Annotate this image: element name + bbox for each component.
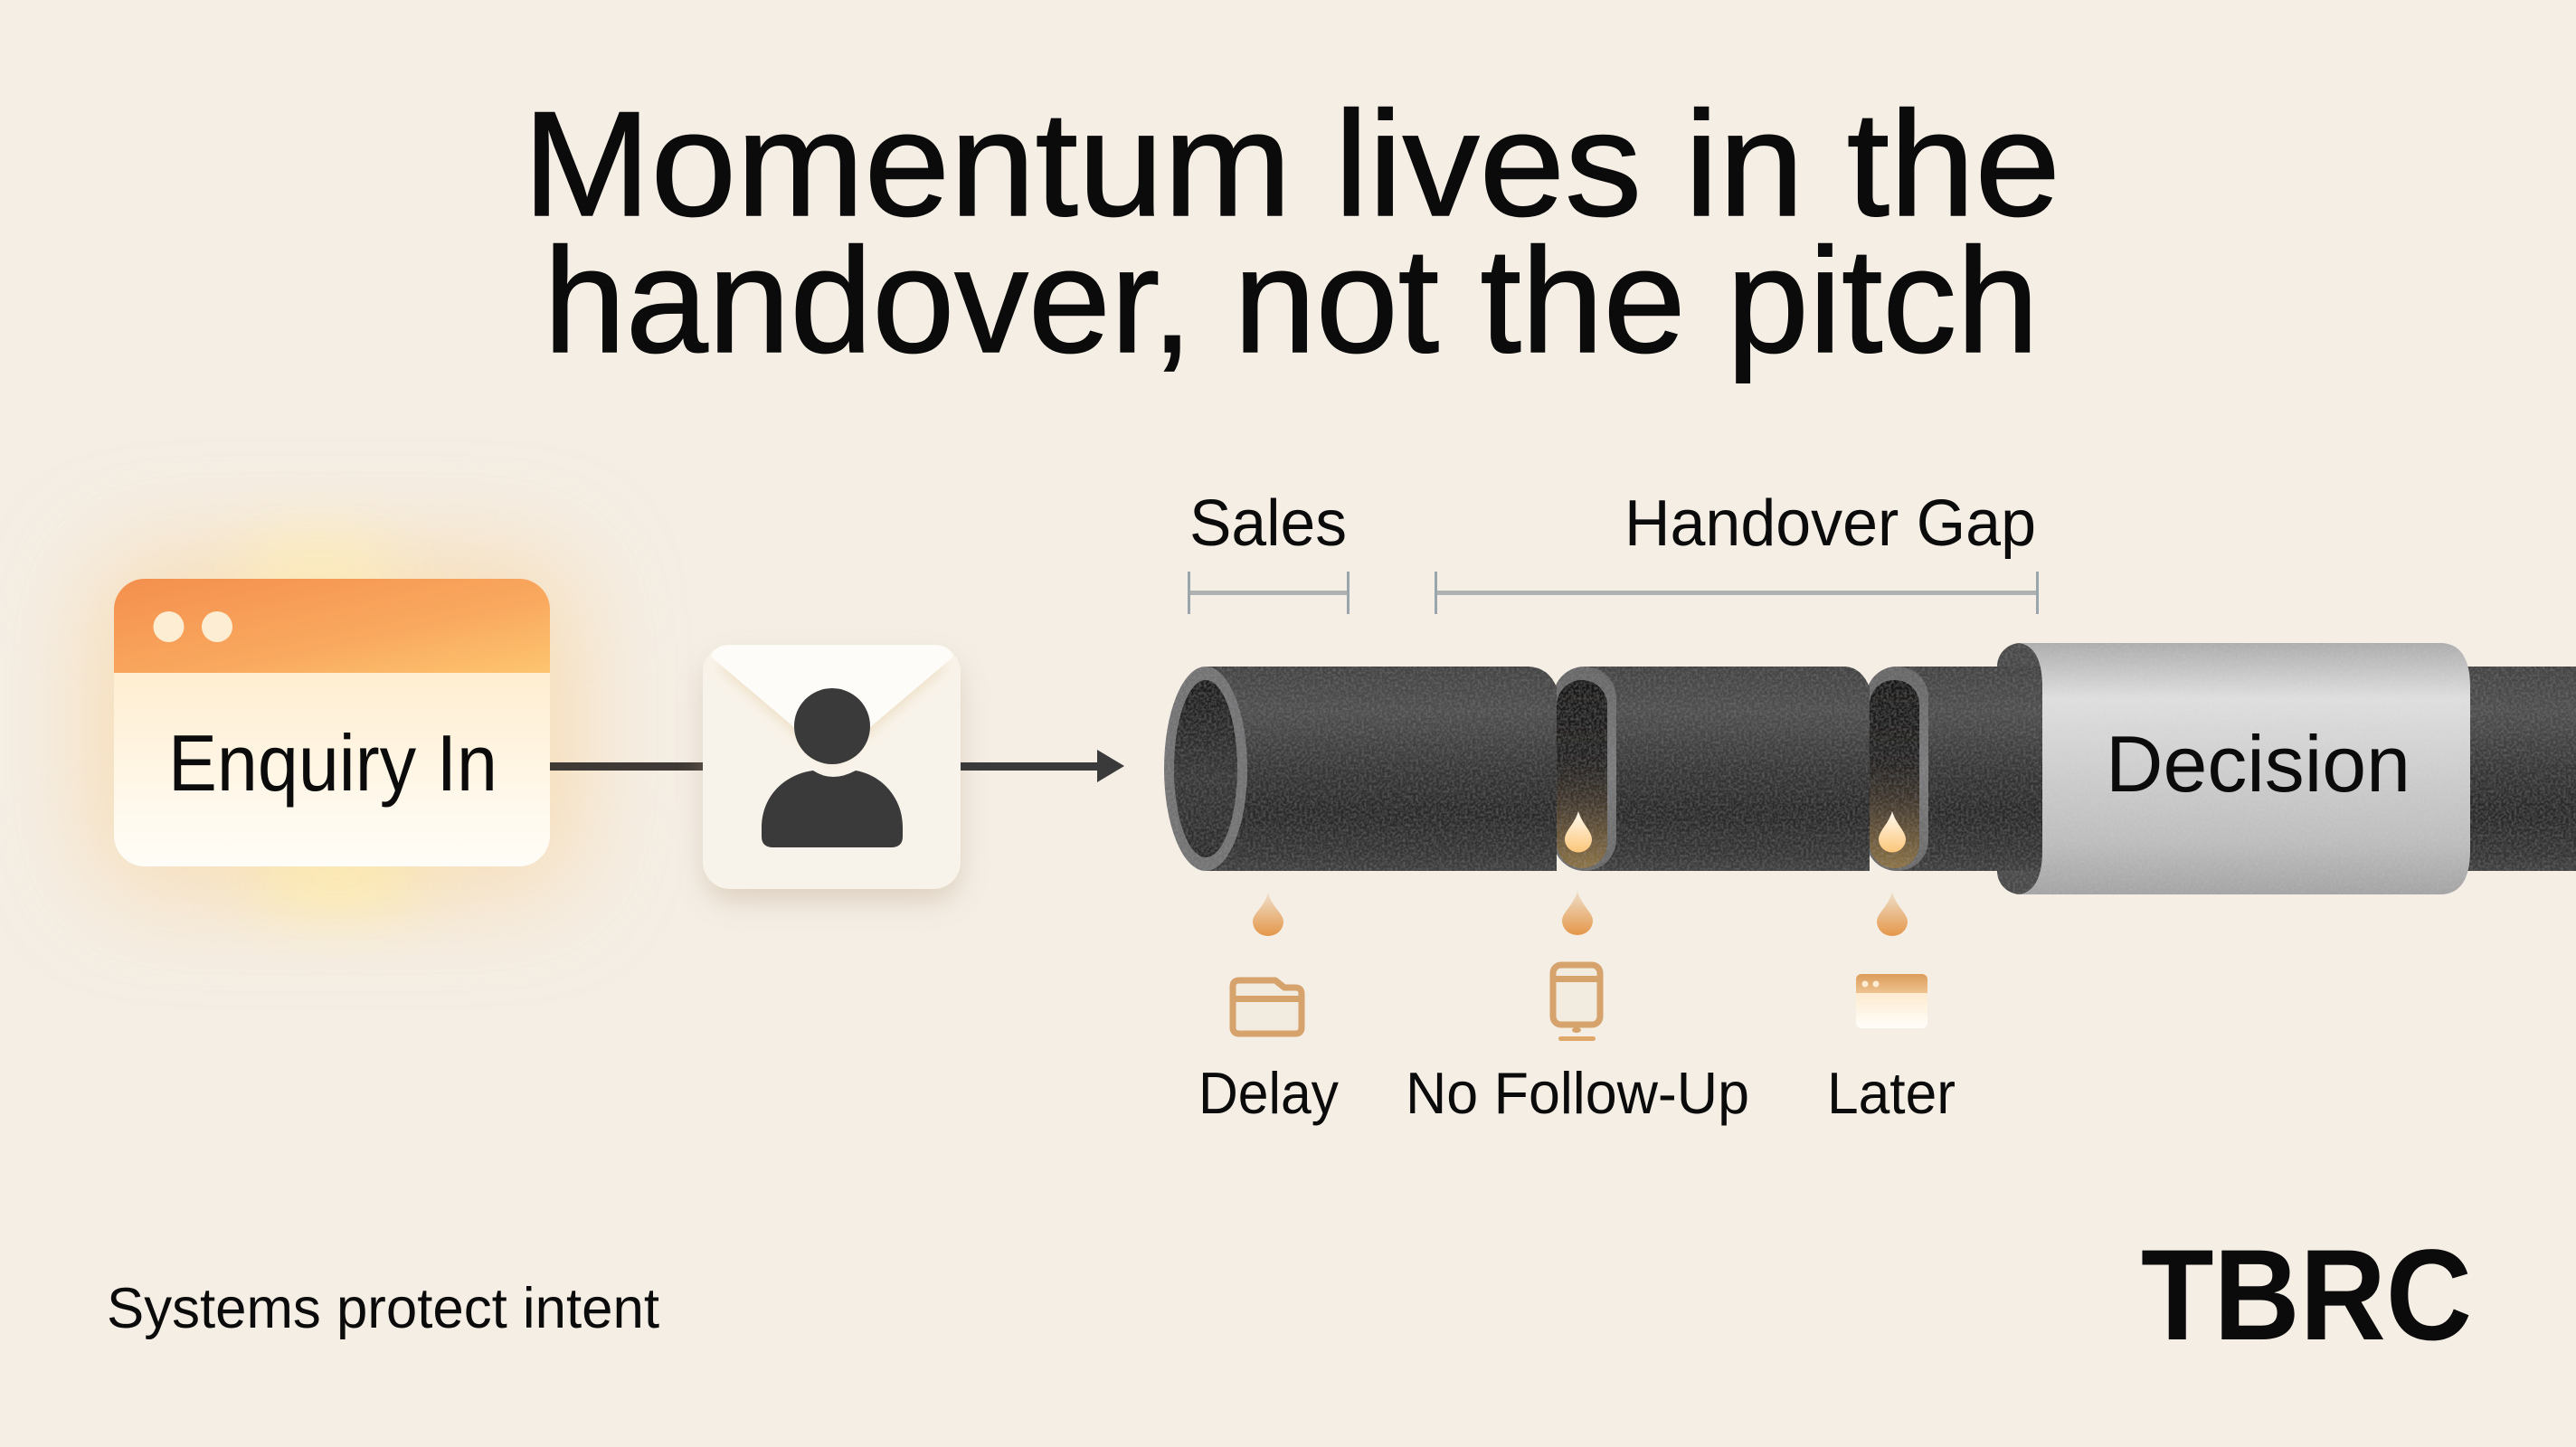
- label: sales: Sales: [1189, 487, 1347, 560]
- label: Later: [1827, 1060, 1956, 1126]
- title: [523, 80, 2060, 383]
- pipe segment 3: [1896, 667, 2044, 871]
- pipe segment 1: [1206, 667, 1557, 871]
- pipe: [1164, 643, 2576, 894]
- column: no follow-up: [1406, 891, 1749, 1126]
- footer tagline: Systems protect intent: [107, 1277, 659, 1340]
- panel: enquiry card: [114, 579, 550, 866]
- flap shadow: [715, 664, 950, 765]
- connector line: enquiry to contact: [550, 762, 703, 771]
- title: handover, not the pitch: [544, 217, 2039, 383]
- arrow: contact to pipe: [961, 750, 1124, 782]
- bracket: handover gap: [1435, 572, 2039, 614]
- icon: person: [762, 688, 903, 847]
- icon: drop: [1562, 891, 1593, 935]
- icon: phone: [1553, 965, 1600, 1041]
- logo: TBRC: TBRC: [2141, 1224, 2472, 1367]
- icon: drop: [1253, 893, 1283, 936]
- card label: Enquiry In: [168, 718, 497, 808]
- collar lip: [1997, 643, 2060, 894]
- label: handover gap: Handover Gap: [1624, 487, 2036, 560]
- decision collar: [2019, 643, 2470, 894]
- label: No Follow-Up: [1406, 1060, 1749, 1126]
- icon: folder: [1233, 980, 1302, 1034]
- panel: contact envelope card: [703, 645, 961, 900]
- icon: drop: [1877, 892, 1908, 936]
- title: Momentum lives in the: [523, 80, 2060, 247]
- icon: window: [1856, 974, 1927, 1028]
- label: decision: Decision: [2106, 719, 2410, 809]
- column: delay: [1198, 893, 1339, 1126]
- panel: enquiry glow: [99, 541, 570, 906]
- pipe opening: [1164, 667, 1247, 871]
- pipe segment 2: [1585, 667, 1870, 871]
- card header bar: [114, 579, 550, 673]
- envelope flap: [711, 645, 953, 760]
- pipe right end: [2442, 667, 2576, 871]
- bracket: sales: [1188, 572, 1350, 614]
- window dots: [154, 611, 232, 642]
- label: Delay: [1198, 1060, 1339, 1126]
- leak ring 3: [1866, 667, 1928, 871]
- leak ring 2: [1553, 667, 1616, 871]
- column: later: [1827, 892, 1956, 1126]
